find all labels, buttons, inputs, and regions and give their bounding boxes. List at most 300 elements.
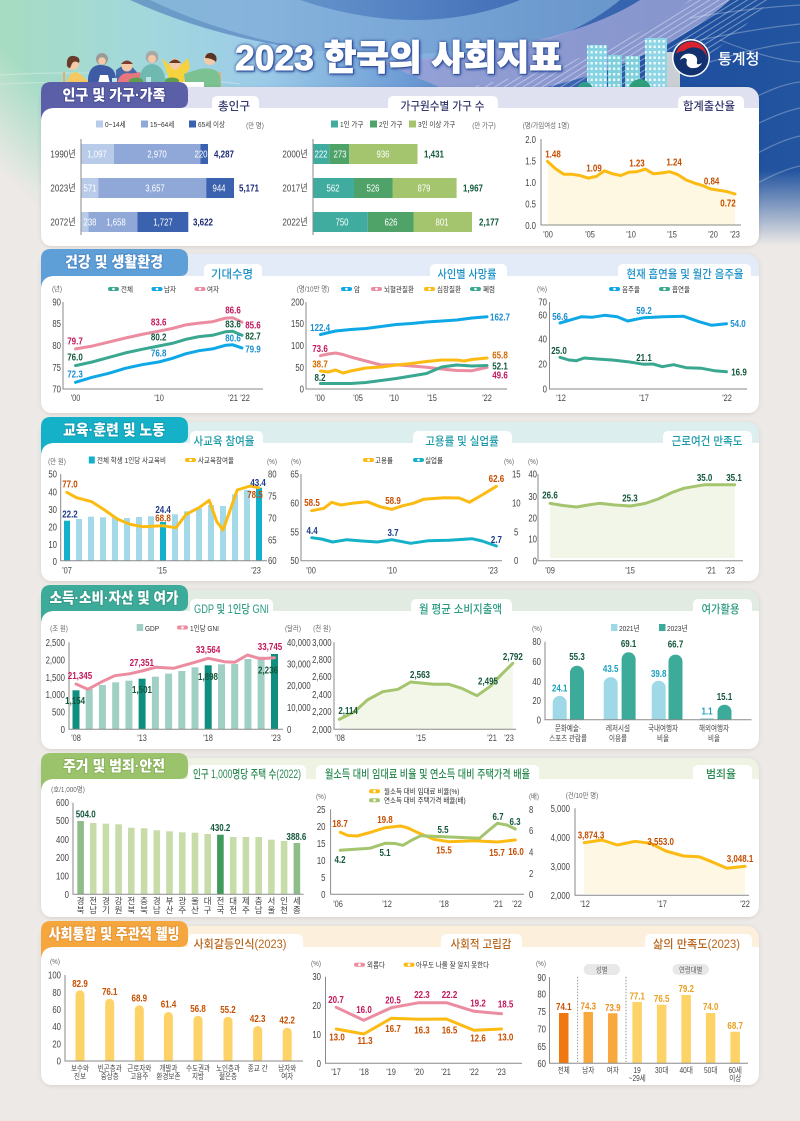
chart: social conflict perception: 61.4 xyxy=(161,998,177,1010)
chart: rent and price ratios: '06 xyxy=(333,898,343,909)
subtitle tabs xyxy=(212,96,744,113)
chart: social conflict perception: 개발과 xyxy=(159,1063,178,1073)
chart: social conflict perception: 진보 xyxy=(74,1071,86,1081)
chart: leisure activities: 2021년 xyxy=(619,624,639,633)
panel: income, consumption, assets and leisure xyxy=(41,585,759,749)
chart: life satisfaction: 남자 xyxy=(582,1065,595,1075)
chart: deaths by cause: 65.8 xyxy=(492,349,508,361)
chart: housing per 1,000 people: 504.0 xyxy=(76,808,96,820)
subtitle tabs: 합계출산율 xyxy=(683,99,735,113)
chart: rent and price ratios: 0 xyxy=(529,889,533,900)
chart: monthly consumption expenditure: 2,000 xyxy=(312,724,332,735)
chart: housing per 1,000 people: 400 xyxy=(56,834,69,845)
chart: private education: 78.5 xyxy=(247,489,263,500)
chart: total fertility rate: 0.84 xyxy=(704,175,720,187)
chart: life expectancy: 82.7 xyxy=(245,330,261,342)
chart: rent and price ratios: '12 xyxy=(382,898,392,909)
chart: life satisfaction: 30대 xyxy=(655,1065,668,1075)
chart: housing per 1,000 people: 주 xyxy=(178,905,186,915)
chart: GDP and GNI per capita: '13 xyxy=(137,732,147,743)
chart: social isolation: (%) xyxy=(311,961,321,968)
chart: social isolation: 13.0 xyxy=(498,1031,513,1043)
chart: life expectancy: '10 xyxy=(154,392,164,403)
chart: work satisfaction: (%) xyxy=(528,459,538,466)
chart: households by size stacked bars: 801 xyxy=(435,217,449,228)
chart: housing per 1,000 people: (호/1,000명) xyxy=(51,784,85,794)
chart: deaths by cause: 38.7 xyxy=(312,358,328,370)
chart: leisure activities: 20 xyxy=(532,695,541,706)
chart: social isolation: 20.5 xyxy=(385,994,401,1006)
chart: monthly consumption expenditure: '15 xyxy=(416,732,426,743)
illustration: city buildings xyxy=(577,38,680,101)
chart: life expectancy: 86.6 xyxy=(225,304,241,316)
chart: social conflict perception: 중상층 xyxy=(101,1071,119,1081)
subtitle tabs xyxy=(190,599,752,616)
section tab xyxy=(41,417,188,457)
chart: life satisfaction: 74.0 xyxy=(703,1001,718,1012)
chart: life expectancy: 79.7 xyxy=(67,335,83,347)
chart: housing per 1,000 people: 남 xyxy=(153,905,161,915)
chart: total population stacked bars: 0~14세 xyxy=(105,120,126,129)
chart: life expectancy: 85 xyxy=(52,318,61,329)
chart: employment and unemployment: 고용률 xyxy=(375,457,393,465)
chart: total population stacked bars: 571 xyxy=(83,183,97,194)
chart: households by size stacked bars: 1인 가구 xyxy=(340,120,364,129)
chart: total fertility rate: 0.72 xyxy=(720,197,736,209)
chart: crime rate: 3,000 xyxy=(551,861,570,872)
chart: social conflict perception: 지방 xyxy=(192,1071,204,1081)
chart: life satisfaction: 80 xyxy=(537,988,546,1000)
chart: GDP and GNI per capita: 1,000 xyxy=(46,689,65,700)
chart: monthly consumption expenditure: 2,200 xyxy=(312,706,332,717)
chart: life expectancy: 70 xyxy=(52,383,61,395)
chart: life expectancy: 남자 xyxy=(164,285,176,294)
section tab xyxy=(41,249,188,290)
chart: housing per 1,000 people: 200 xyxy=(56,852,69,863)
chart: leisure activities: 39.8 xyxy=(651,668,666,679)
chart: housing per 1,000 people: 전 xyxy=(229,905,237,915)
chart: monthly consumption expenditure: '08 xyxy=(335,732,345,743)
chart: leisure activities: 66.7 xyxy=(668,638,683,650)
chart: leisure activities: 24.1 xyxy=(552,682,567,694)
chart: leisure activities: 문화예술· xyxy=(555,723,581,733)
chart: housing per 1,000 people: 울 xyxy=(267,905,275,915)
chart: GDP and GNI per capita: 21,345 xyxy=(68,670,92,681)
subtitle tabs: GDP 및 1인당 GNI xyxy=(194,603,269,616)
chart: life satisfaction: 79.2 xyxy=(678,983,694,994)
chart: GDP and GNI per capita: '18 xyxy=(203,732,213,743)
chart: housing per 1,000 people: 전 xyxy=(127,896,135,906)
chart: total population stacked bars: 5,171 xyxy=(239,182,259,194)
chart: social conflict perception xyxy=(48,959,306,1081)
chart: total population stacked bars: 4,287 xyxy=(214,148,234,160)
chart: private education: '15 xyxy=(157,565,167,576)
chart: employment and unemployment: 0 xyxy=(514,555,518,566)
chart: leisure activities: 비율 xyxy=(657,733,669,743)
subtitle tabs: 여가활용 xyxy=(702,602,740,616)
chart: total population stacked bars: 65세 이상 xyxy=(198,120,226,129)
chart: GDP and GNI per capita: 0 xyxy=(61,724,65,735)
chart: employment and unemployment: 58.5 xyxy=(304,497,320,508)
chart: social conflict perception: 20 xyxy=(52,1038,61,1050)
chart: employment and unemployment: 10 xyxy=(512,497,521,509)
chart: life satisfaction: 19 xyxy=(634,1065,641,1075)
chart: smoking and drinking: 음주율 xyxy=(622,286,640,294)
chart: social isolation: 11.3 xyxy=(357,1035,373,1046)
chart: deaths by cause: 50 xyxy=(295,362,304,373)
chart: total fertility rate: 1.23 xyxy=(629,157,645,169)
chart: rent and price ratios: 연소득 대비 주택가격 배율(배) xyxy=(384,796,466,805)
chart: employment and unemployment: 60 xyxy=(290,497,299,509)
subtitle tabs: 삶의 만족도(2023) xyxy=(653,938,740,951)
chart: housing per 1,000 people: 북 xyxy=(77,905,85,915)
chart: work satisfaction: 0 xyxy=(533,555,537,567)
chart: social isolation: 18.5 xyxy=(498,998,513,1010)
chart: private education: 80 xyxy=(268,468,277,480)
chart: total population stacked bars: 220 xyxy=(194,149,208,160)
chart: households by size stacked bars: 2000년 xyxy=(282,149,308,160)
chart: smoking and drinking xyxy=(537,285,747,403)
chart: crime rate: '17 xyxy=(657,898,667,909)
chart: monthly consumption expenditure: 2,600 xyxy=(312,671,332,682)
chart: total fertility rate xyxy=(523,120,741,240)
chart: smoking and drinking: '17 xyxy=(639,392,649,403)
chart: monthly consumption expenditure: 2,114 xyxy=(338,705,359,716)
chart: housing per 1,000 people: 제 xyxy=(242,896,250,906)
chart: smoking and drinking: 16.9 xyxy=(731,366,747,378)
chart: GDP and GNI per capita: 2,000 xyxy=(46,654,65,666)
chart: private education: 20 xyxy=(48,521,57,533)
chart: life expectancy: 76.0 xyxy=(67,351,83,363)
chart: private education xyxy=(48,456,277,576)
chart: GDP and GNI per capita: 33,564 xyxy=(196,644,221,655)
chart: social conflict perception: 42.2 xyxy=(279,1014,295,1026)
chart: private education: 0 xyxy=(53,556,57,567)
chart: households by size stacked bars: 936 xyxy=(376,149,390,160)
chart: private education: (%) xyxy=(267,459,277,466)
chart: housing per 1,000 people: 구 xyxy=(204,905,212,915)
chart: GDP and GNI per capita: '23 xyxy=(271,732,281,743)
chart: housing per 1,000 people: 남 xyxy=(255,905,263,915)
chart: smoking and drinking: 40 xyxy=(538,333,547,345)
chart: rent and price ratios: 18.7 xyxy=(332,818,348,829)
chart: housing per 1,000 people: 500 xyxy=(56,815,69,826)
chart: employment and unemployment: 2.7 xyxy=(491,534,502,545)
chart: smoking and drinking: (%) xyxy=(537,286,547,294)
chart: life satisfaction: 77.1 xyxy=(629,990,645,1002)
panel: housing, crime and safety xyxy=(41,753,759,917)
chart: social isolation: 30 xyxy=(312,971,321,982)
chart: life expectancy: (년) xyxy=(52,284,62,294)
chart: leisure activities: 80 xyxy=(532,636,541,647)
chart: social isolation: 22.3 xyxy=(414,989,430,1000)
chart: crime rate xyxy=(551,790,753,909)
subtitle tabs xyxy=(188,765,752,781)
subtitle tabs xyxy=(204,264,751,281)
chart: leisure activities: 0 xyxy=(537,714,541,726)
chart: deaths by cause: 150 xyxy=(291,318,304,329)
chart: social isolation: '23 xyxy=(496,1066,506,1077)
chart: deaths by cause: 200 xyxy=(291,296,304,308)
chart: GDP and GNI per capita: 1,154 xyxy=(65,695,86,706)
chart: rent and price ratios: 6.7 xyxy=(492,811,504,822)
chart: employment and unemployment: '10 xyxy=(387,565,397,576)
chart: smoking and drinking: 21.1 xyxy=(636,352,652,363)
chart: leisure activities: 60 xyxy=(532,656,541,667)
chart: social isolation: 13.0 xyxy=(329,1031,345,1043)
chart: social isolation: 16.3 xyxy=(414,1024,430,1036)
chart: monthly consumption expenditure: 2,800 xyxy=(312,654,332,665)
chart: leisure activities: 69.1 xyxy=(621,638,636,649)
chart: rent and price ratios: 4 xyxy=(529,846,533,858)
chart: leisure activities: 국내여행자 xyxy=(648,723,678,733)
chart: employment and unemployment: 실업률 xyxy=(425,456,443,465)
chart: deaths by cause: '22 xyxy=(482,392,492,403)
chart: deaths by cause: '00 xyxy=(315,392,325,403)
chart: rent and price ratios xyxy=(316,787,539,909)
chart: total fertility rate: 1.09 xyxy=(586,162,602,174)
chart: total population stacked bars: 15~64세 xyxy=(150,120,174,129)
chart: social isolation: '21 xyxy=(441,1066,451,1077)
chart: households by size stacked bars: 750 xyxy=(335,217,349,228)
chart: life satisfaction: 73.9 xyxy=(605,1002,621,1013)
chart: life satisfaction: (%) xyxy=(536,961,546,968)
chart: GDP and GNI per capita: 0 xyxy=(287,724,291,735)
chart: crime rate: 3,874.3 xyxy=(578,829,604,841)
chart: private education: 22.2 xyxy=(62,508,78,520)
chart: employment and unemployment: 55 xyxy=(290,526,299,538)
chart: deaths by cause: 뇌혈관질환 xyxy=(384,285,414,294)
chart: private education: 43.4 xyxy=(250,477,267,488)
chart: households by size stacked bars: 2인 가구 xyxy=(379,120,403,129)
chart: housing per 1,000 people: 국 xyxy=(216,905,224,915)
chart: GDP and GNI per capita: 27,351 xyxy=(130,657,154,668)
chart: life satisfaction: 76.5 xyxy=(654,993,669,1004)
chart: total population stacked bars: 1,658 xyxy=(106,217,126,228)
chart: leisure activities: 레저시설 xyxy=(606,723,630,733)
chart: employment and unemployment: 65 xyxy=(290,468,299,480)
chart: total fertility rate: '23 xyxy=(730,229,740,240)
chart: work satisfaction: '21 xyxy=(706,565,716,576)
chart: social conflict perception: 노인층과 xyxy=(216,1063,240,1073)
chart: life satisfaction: 75 xyxy=(537,1006,546,1017)
chart: GDP and GNI per capita: (달러) xyxy=(285,623,301,633)
chart: life satisfaction: 이상 xyxy=(729,1073,742,1083)
chart: households by size stacked bars: (만 가구) xyxy=(472,120,496,130)
chart: deaths by cause: 암 xyxy=(354,286,360,294)
chart: GDP and GNI per capita: GDP xyxy=(145,626,159,633)
chart: monthly consumption expenditure: '21 xyxy=(487,732,497,743)
chart: social conflict perception: 빈곤층과 xyxy=(98,1063,122,1073)
chart: private education: '07 xyxy=(62,565,72,576)
chart: smoking and drinking: 0 xyxy=(543,383,547,395)
chart: rent and price ratios: 6 xyxy=(529,825,533,836)
chart: housing per 1,000 people: 대 xyxy=(229,896,237,906)
section tab: 주거 및 범죄·안전 xyxy=(63,758,165,775)
chart: life satisfaction: 여자 xyxy=(607,1065,619,1075)
chart: deaths by cause: 심장질환 xyxy=(437,285,461,294)
chart: leisure activities: 40 xyxy=(532,676,541,687)
chart: crime rate: (건/10만 명) xyxy=(566,790,598,800)
chart: rent and price ratios: 5 xyxy=(321,872,325,883)
chart: housing per 1,000 people: 100 xyxy=(56,870,69,882)
panel body xyxy=(41,443,759,581)
chart: social conflict perception: 80 xyxy=(52,987,61,998)
panel body xyxy=(41,947,759,1085)
chart: work satisfaction: 25.3 xyxy=(622,492,638,504)
chart: life expectancy: 90 xyxy=(52,296,61,308)
chart: private education: 사교육참여율 xyxy=(198,456,234,465)
panel body xyxy=(41,276,759,413)
chart: social conflict perception: 60 xyxy=(52,1004,61,1015)
chart: housing per 1,000 people: 세 xyxy=(293,896,301,906)
chart: social isolation: 16.7 xyxy=(385,1023,401,1034)
chart: rent and price ratios: 5.5 xyxy=(437,824,449,835)
chart: monthly consumption expenditure: 2,792 xyxy=(503,651,523,662)
chart: crime rate: 3,048.1 xyxy=(727,853,753,864)
panel: health and environment xyxy=(41,249,759,413)
chart: households by size stacked bars: 2017년 xyxy=(282,183,308,194)
chart: life expectancy: 80.2 xyxy=(151,331,166,343)
chart: smoking and drinking: '22 xyxy=(722,392,732,403)
chart: housing per 1,000 people: 충 xyxy=(140,896,148,906)
chart: life satisfaction: 연령대별 xyxy=(679,965,702,975)
chart: housing per 1,000 people: 0 xyxy=(65,889,69,900)
chart: housing per 1,000 people: 주 xyxy=(242,905,250,915)
chart: social isolation: '20 xyxy=(414,1066,424,1077)
chart: GDP and GNI per capita: 40,000 xyxy=(287,637,311,648)
chart: leisure activities: (%) xyxy=(532,626,542,633)
illustration: family at table xyxy=(63,51,221,88)
chart: life expectancy: 76.8 xyxy=(151,347,166,359)
chart: households by size stacked bars: 526 xyxy=(366,183,380,194)
subtitle tabs: 사교육 참여율 xyxy=(194,435,255,448)
chart: life expectancy: '00 xyxy=(71,392,81,403)
chart: private education: 77.0 xyxy=(62,478,78,490)
chart: housing per 1,000 people: 경 xyxy=(77,896,85,906)
subtitle tabs: 월소득 대비 임대료 비율 및 연소득 대비 주택가격 배율 xyxy=(325,767,530,781)
section tab: 소득·소비·자산 및 여가 xyxy=(50,590,179,607)
chart: life expectancy: 80 xyxy=(52,340,61,351)
chart: social conflict perception: 젊은층 xyxy=(219,1071,237,1081)
chart: life satisfaction: 60 xyxy=(537,1058,546,1069)
section tab xyxy=(41,921,188,961)
chart: housing per 1,000 people: 종 xyxy=(293,905,301,915)
chart: rent and price ratios: 25 xyxy=(317,804,325,815)
chart: rent and price ratios: 19.8 xyxy=(377,814,393,825)
chart: private education: 30 xyxy=(48,504,57,515)
chart: total fertility rate: 1.24 xyxy=(666,156,683,168)
agency name: 통계청 xyxy=(718,51,759,68)
chart: smoking and drinking: 흡연율 xyxy=(672,285,690,294)
chart: work satisfaction: 35.0 xyxy=(697,472,712,483)
chart: rent and price ratios: '21 xyxy=(493,898,503,909)
chart: social isolation: '19 xyxy=(386,1066,396,1077)
section tab: 교육·훈련 및 노동 xyxy=(63,422,165,439)
subtitle tabs: 기대수명 xyxy=(211,267,253,281)
chart: work satisfaction: '23 xyxy=(725,565,735,576)
chart: monthly consumption expenditure: 3,000 xyxy=(312,637,332,648)
chart: social conflict perception: 0 xyxy=(57,1055,61,1067)
chart: social conflict perception: 42.3 xyxy=(250,1013,265,1024)
chart: life expectancy: 여자 xyxy=(207,285,219,294)
chart: social isolation: 0 xyxy=(317,1058,321,1069)
chart: employment and unemployment: 5 xyxy=(514,526,518,538)
chart: social isolation: 19.2 xyxy=(470,997,486,1009)
chart: life satisfaction: 90 xyxy=(537,972,546,983)
chart: rent and price ratios: 5.1 xyxy=(379,847,391,858)
chart: social isolation: 22.2 xyxy=(442,989,457,1000)
chart: housing per 1,000 people: 북 xyxy=(140,905,148,915)
chart: smoking and drinking: 54.0 xyxy=(730,318,746,329)
chart: social isolation: '17 xyxy=(331,1066,341,1077)
chart: deaths by cause: 0 xyxy=(300,383,304,395)
chart: employment and unemployment: (%) xyxy=(504,459,514,466)
chart: rent and price ratios: 월소득 대비 임대료 비율(%) xyxy=(384,787,459,796)
chart: employment and unemployment: 4.4 xyxy=(307,525,318,536)
chart: social isolation: 16.5 xyxy=(442,1024,457,1036)
chart: work satisfaction: '09 xyxy=(545,565,555,576)
chart: total population stacked bars: 238 xyxy=(83,217,97,228)
chart: employment and unemployment: 3.7 xyxy=(387,527,399,538)
chart: crime rate: 4,000 xyxy=(551,832,570,843)
subtitle tabs: 범죄율 xyxy=(706,768,736,781)
chart: housing per 1,000 people: 원 xyxy=(115,905,123,915)
chart: social isolation: 20 xyxy=(312,1000,321,1011)
chart: total fertility rate: 1.48 xyxy=(545,148,561,160)
chart: total population stacked bars: 3,657 xyxy=(145,183,165,194)
chart: GDP and GNI per capita: 1인당 GNI xyxy=(190,624,219,633)
chart: social conflict perception: 고용주 xyxy=(130,1071,149,1081)
chart: monthly consumption expenditure: 2,495 xyxy=(478,675,498,687)
chart: housing per 1,000 people: 충 xyxy=(255,896,263,906)
chart: social isolation: 아무도 나를 잘 알지 못한다 xyxy=(416,960,490,970)
chart: life satisfaction: 65 xyxy=(537,1041,546,1052)
chart: housing per 1,000 people: 광 xyxy=(178,896,186,906)
section tab xyxy=(41,82,188,122)
chart: employment and unemployment: '00 xyxy=(306,565,316,576)
chart: social isolation: 외롭다 xyxy=(367,960,385,970)
chart: rent and price ratios: 10 xyxy=(317,855,325,866)
chart: rent and price ratios: 8 xyxy=(529,804,533,815)
chart: smoking and drinking: 25.0 xyxy=(551,345,567,356)
chart: total fertility rate: 0.0 xyxy=(525,220,536,231)
chart: private education: 50 xyxy=(48,468,57,480)
chart: deaths by cause: '05 xyxy=(353,392,363,403)
chart: social conflict perception: (%) xyxy=(50,959,60,966)
chart: life expectancy: '22 xyxy=(240,392,250,403)
chart: social conflict perception: 68.9 xyxy=(132,992,147,1004)
chart: monthly consumption expenditure xyxy=(312,623,523,743)
chart: total population stacked bars: 2072년 xyxy=(50,217,76,228)
chart: total fertility rate: 0.5 xyxy=(525,198,536,210)
chart: GDP and GNI per capita: 1,501 xyxy=(132,684,152,695)
chart: deaths by cause: 162.7 xyxy=(490,311,510,323)
chart: households by size stacked bars: 2,177 xyxy=(479,216,499,228)
chart: GDP and GNI per capita: 20,000 xyxy=(287,680,311,691)
chart: housing per 1,000 people: 경 xyxy=(153,896,161,906)
chart: leisure activities xyxy=(532,624,754,743)
chart: life satisfaction: 74.1 xyxy=(556,1001,572,1012)
chart: housing per 1,000 people: 600 xyxy=(56,797,69,808)
chart: life satisfaction: 전체 xyxy=(558,1065,570,1075)
chart: GDP and GNI per capita: 1,500 xyxy=(46,672,65,683)
panel body xyxy=(41,611,759,749)
chart: GDP and GNI per capita: (조 원) xyxy=(50,623,68,633)
chart: life expectancy: 83.6 xyxy=(225,318,241,330)
chart: GDP and GNI per capita: 2,236 xyxy=(258,664,278,676)
chart: life expectancy: 80.6 xyxy=(225,332,241,344)
